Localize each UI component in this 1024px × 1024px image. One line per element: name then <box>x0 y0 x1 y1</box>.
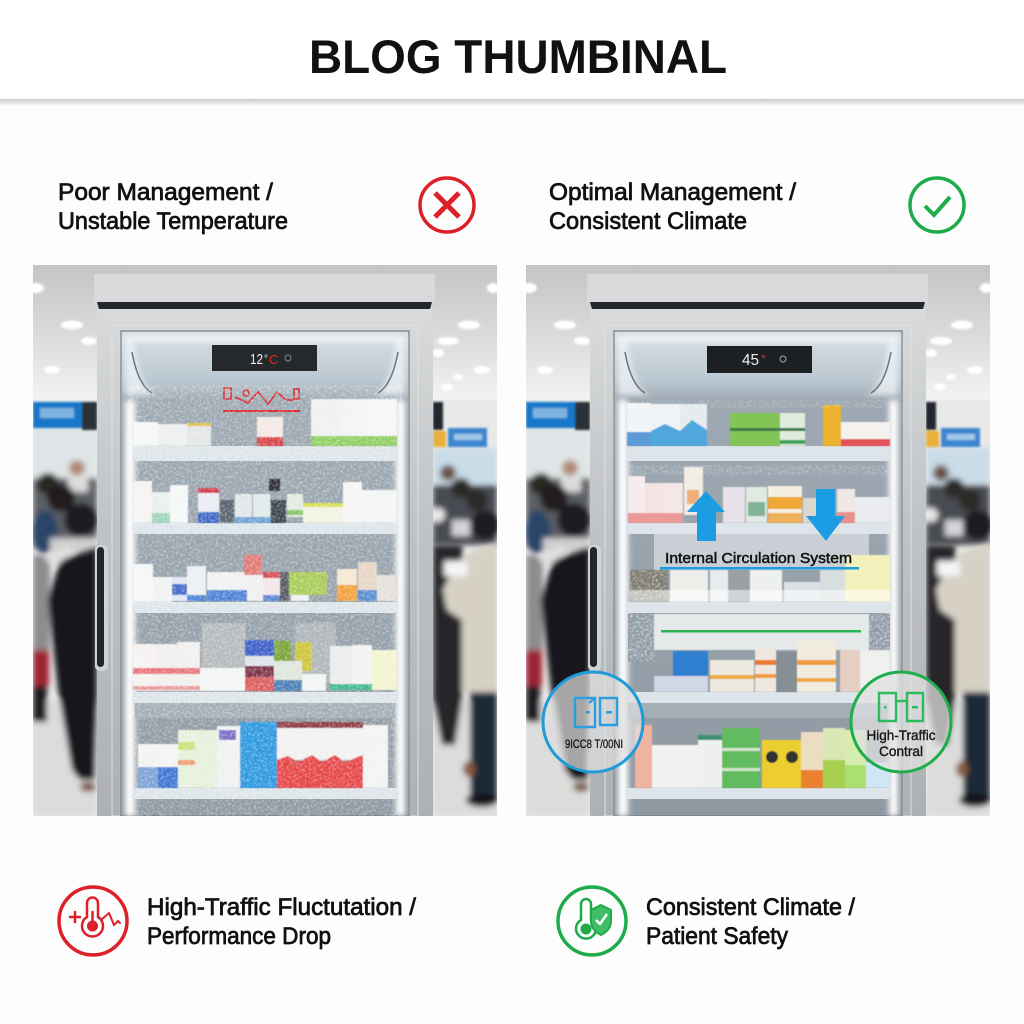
icon: green check <box>910 178 964 232</box>
callout: high traffic control: Contral <box>879 743 923 759</box>
right heading: Consistent Climate <box>549 208 747 235</box>
display: 45 degrees <box>707 346 812 373</box>
shelf 2 products <box>133 479 397 523</box>
left heading: Unstable Temperature <box>58 208 288 235</box>
warning wave graphic <box>223 388 300 411</box>
arrow: air down <box>806 489 845 541</box>
display: 45 degrees: ° <box>761 352 766 366</box>
panel: poor management fridge <box>28 265 500 816</box>
shelf 4 products <box>133 623 397 691</box>
callout: door icon blue <box>543 672 643 772</box>
icon: thermometer fluctuation <box>59 887 127 955</box>
green indicator line <box>661 630 861 632</box>
display: 12 degrees: 12 <box>250 351 263 368</box>
label: internal circulation: Internal Circulation System <box>665 550 852 567</box>
callout: high traffic control: High-Traffic <box>866 727 936 743</box>
shelf 3 products <box>630 555 890 602</box>
wet glass patches <box>628 400 890 662</box>
caption: consistent climate: Consistent Climate / <box>646 894 855 921</box>
left heading: Poor Management / <box>58 179 273 206</box>
pale backdrop behind label <box>654 534 869 570</box>
left heading <box>58 179 288 235</box>
shelf 2 products <box>628 467 890 523</box>
title: BLOG THUMBINAL <box>309 30 727 83</box>
display: 45 degrees: 45 <box>742 352 759 369</box>
icon: thermometer shield <box>558 887 626 955</box>
callout: door icon blue: 9ICC8 T/00NI <box>565 737 623 751</box>
condensation droplets <box>128 385 402 816</box>
caption: high traffic <box>147 894 416 950</box>
caption: consistent climate: Patient Safety <box>646 923 788 950</box>
shelf 5 products <box>635 725 890 788</box>
panel: optimal management fridge <box>521 265 993 816</box>
caption: high traffic: High-Traffic Fluctutation / <box>147 894 416 921</box>
icon: red cross <box>420 178 474 232</box>
display: 12 degrees: C <box>269 352 278 367</box>
right heading: Optimal Management / <box>549 179 796 206</box>
shelf 1 products <box>627 403 890 446</box>
shelf 5 products <box>138 722 388 788</box>
display: 12 degrees <box>212 345 317 371</box>
caption: high traffic: Performance Drop <box>147 923 331 950</box>
shelf 1 products <box>133 399 397 446</box>
caption: consistent climate <box>646 894 855 950</box>
shelf 4 products <box>654 614 890 692</box>
right heading <box>549 179 796 235</box>
arrow: air up <box>687 491 725 541</box>
display: 12 degrees: ° <box>264 354 268 365</box>
shelf 3 products <box>133 555 396 602</box>
page header band <box>0 0 1024 106</box>
callout: high traffic control <box>851 672 951 772</box>
